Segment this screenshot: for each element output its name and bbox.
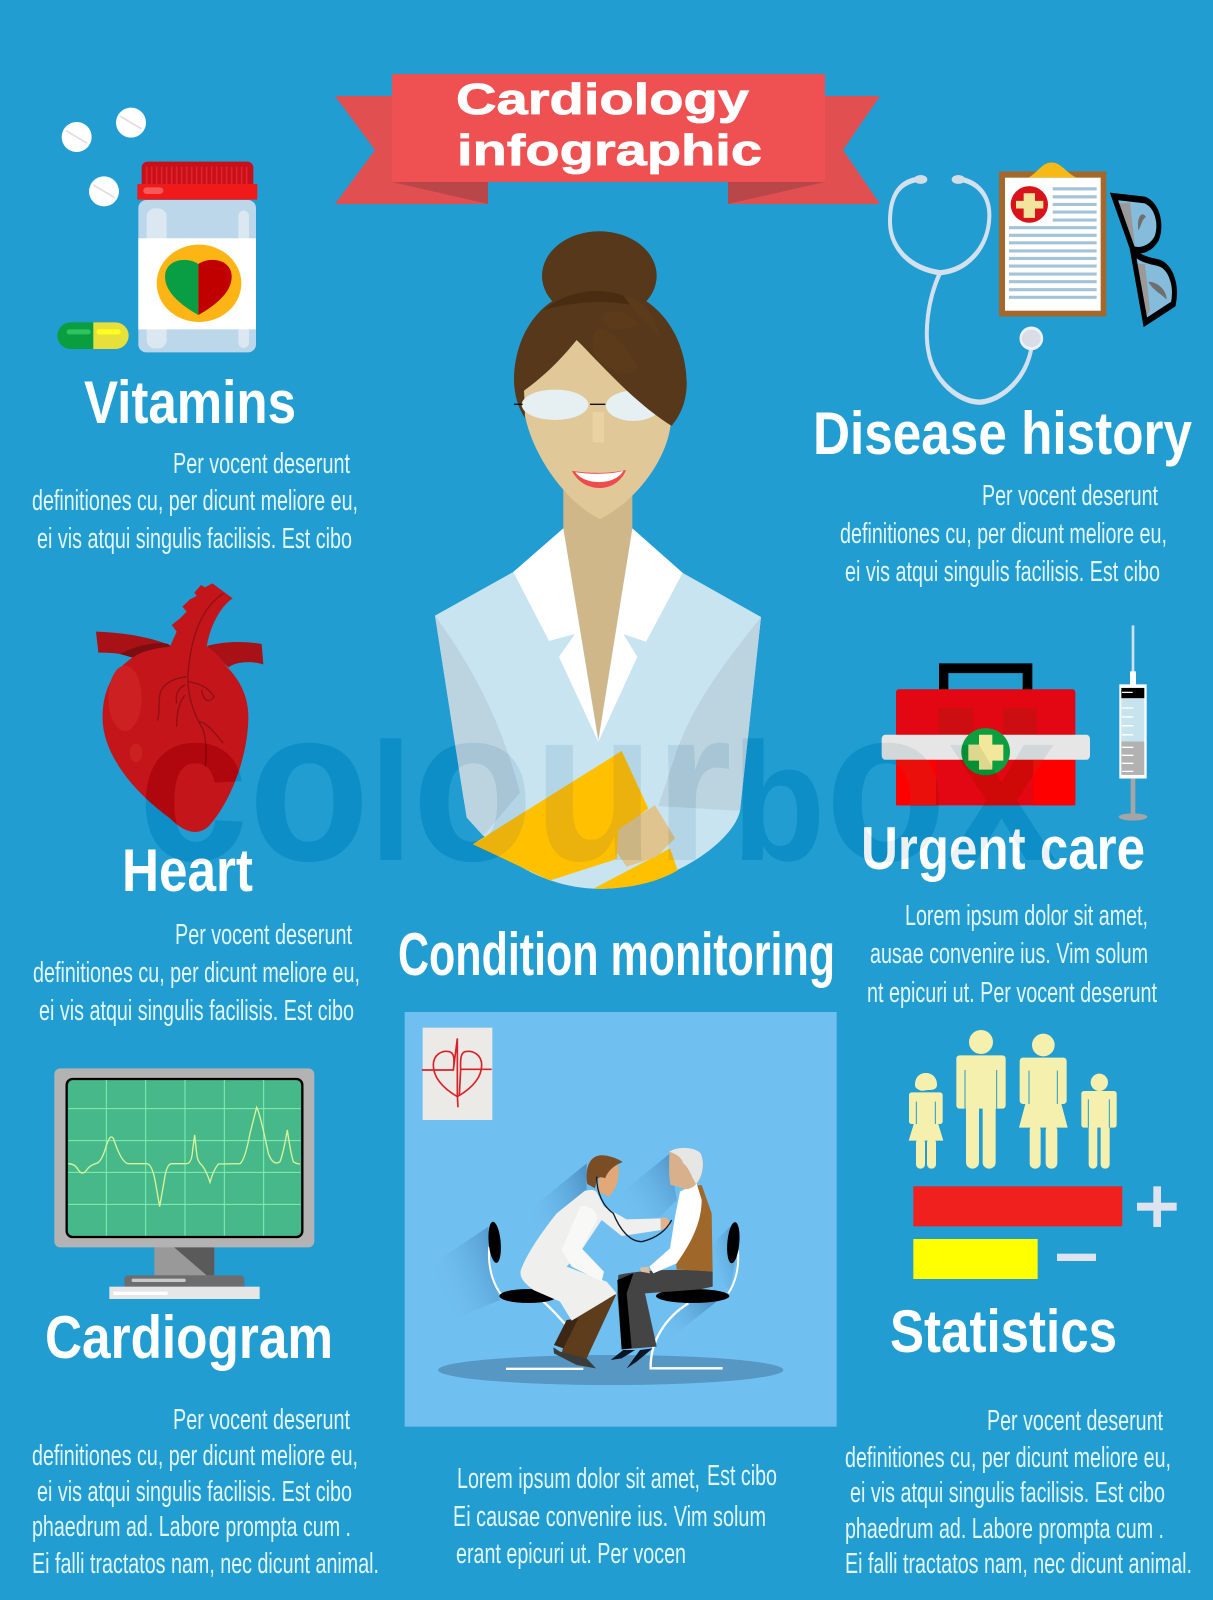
stand	[109, 1247, 260, 1299]
text block: cardiogram: Per vocent deserunt	[173, 1404, 350, 1436]
illustration: woman doctor	[435, 231, 761, 889]
right chair	[651, 1222, 741, 1368]
screen	[54, 1068, 314, 1247]
doctor	[520, 1155, 672, 1368]
heading: Urgent care: Urgent care	[861, 815, 1145, 882]
text block: cardiogram: Ei falli tractatos nam, nec dicunt animal.	[32, 1548, 379, 1580]
floor shadow	[438, 1355, 783, 1385]
glasses	[1114, 196, 1174, 322]
icon: first aid kit	[882, 663, 1090, 805]
left chair	[487, 1221, 583, 1370]
folder	[473, 751, 678, 889]
text block: vitamins: definitiones cu, per dicunt meliore eu,	[32, 485, 358, 517]
capsule	[57, 322, 129, 349]
stethoscope	[890, 175, 1042, 402]
icon: monitor with cardiogram	[54, 1068, 314, 1299]
text block: heart: Per vocent deserunt	[175, 919, 352, 951]
text block: cardiogram: definitiones cu, per dicunt meliore eu,	[32, 1440, 358, 1472]
text block: heart: definitiones cu, per dicunt meliore eu,	[33, 957, 360, 989]
text block: cardiogram	[32, 1404, 379, 1580]
text block: condition monitoring: Ei causae convenire ius. Vim solum	[453, 1501, 766, 1533]
title text: Cardiology	[456, 75, 750, 124]
icon: stethoscope, clipboard, glasses	[890, 162, 1174, 402]
watermark: colourbox	[138, 664, 1057, 907]
text block: heart	[33, 919, 360, 1027]
title ribbon	[335, 74, 880, 204]
head	[514, 287, 687, 519]
minus bar	[913, 1239, 1096, 1279]
icon: vitamins bottle and pills	[57, 108, 257, 352]
title text: infographic	[457, 126, 762, 175]
long shadows	[433, 1153, 737, 1347]
text block: condition monitoring	[453, 1460, 777, 1570]
ecg heart poster	[422, 1028, 492, 1120]
heading: Statistics: Statistics	[890, 1298, 1117, 1365]
text block: vitamins	[32, 448, 358, 555]
collar	[513, 528, 683, 742]
text block: condition monitoring: Est cibo	[707, 1460, 777, 1492]
patient	[611, 1148, 713, 1368]
text block: disease history	[840, 480, 1167, 588]
icon: syringe	[1119, 625, 1147, 820]
plus bar	[913, 1186, 1177, 1227]
text block: cardiogram: ei vis atqui singulis facilisis. Est cibo	[37, 1476, 352, 1508]
heading: Cardiogram: Cardiogram	[45, 1304, 333, 1371]
panel: condition monitoring scene	[405, 1012, 837, 1427]
text block: condition monitoring: Lorem ipsum dolor sit amet,	[457, 1463, 700, 1495]
text block: condition monitoring: erant epicuri ut. Per vocen	[456, 1538, 686, 1570]
tablets	[62, 108, 146, 206]
text block: vitamins: ei vis atqui singulis facilisis. Est cibo	[37, 523, 352, 555]
icon: heart	[96, 583, 263, 832]
jacket	[435, 528, 761, 889]
hand	[617, 805, 675, 867]
family figures	[909, 1030, 1117, 1169]
text block: urgent care	[867, 900, 1157, 1009]
heading: Vitamins: Vitamins	[84, 369, 296, 436]
heading: Condition monitoring: Condition monitoring	[398, 921, 835, 988]
text block: cardiogram: phaedrum ad. Labore prompta cum .	[32, 1511, 351, 1543]
bottle	[137, 162, 257, 352]
text block: statistics	[845, 1405, 1192, 1580]
chart: family figures and plus/minus bars	[909, 1030, 1177, 1279]
hair bun	[542, 231, 657, 320]
text block: vitamins: Per vocent deserunt	[173, 448, 350, 480]
title text	[456, 75, 762, 175]
heading: Heart: Heart	[122, 837, 253, 904]
neck	[563, 485, 632, 740]
clipboard	[999, 162, 1106, 317]
text block: heart: ei vis atqui singulis facilisis. Est cibo	[39, 995, 354, 1027]
ecg trace	[68, 1107, 300, 1207]
